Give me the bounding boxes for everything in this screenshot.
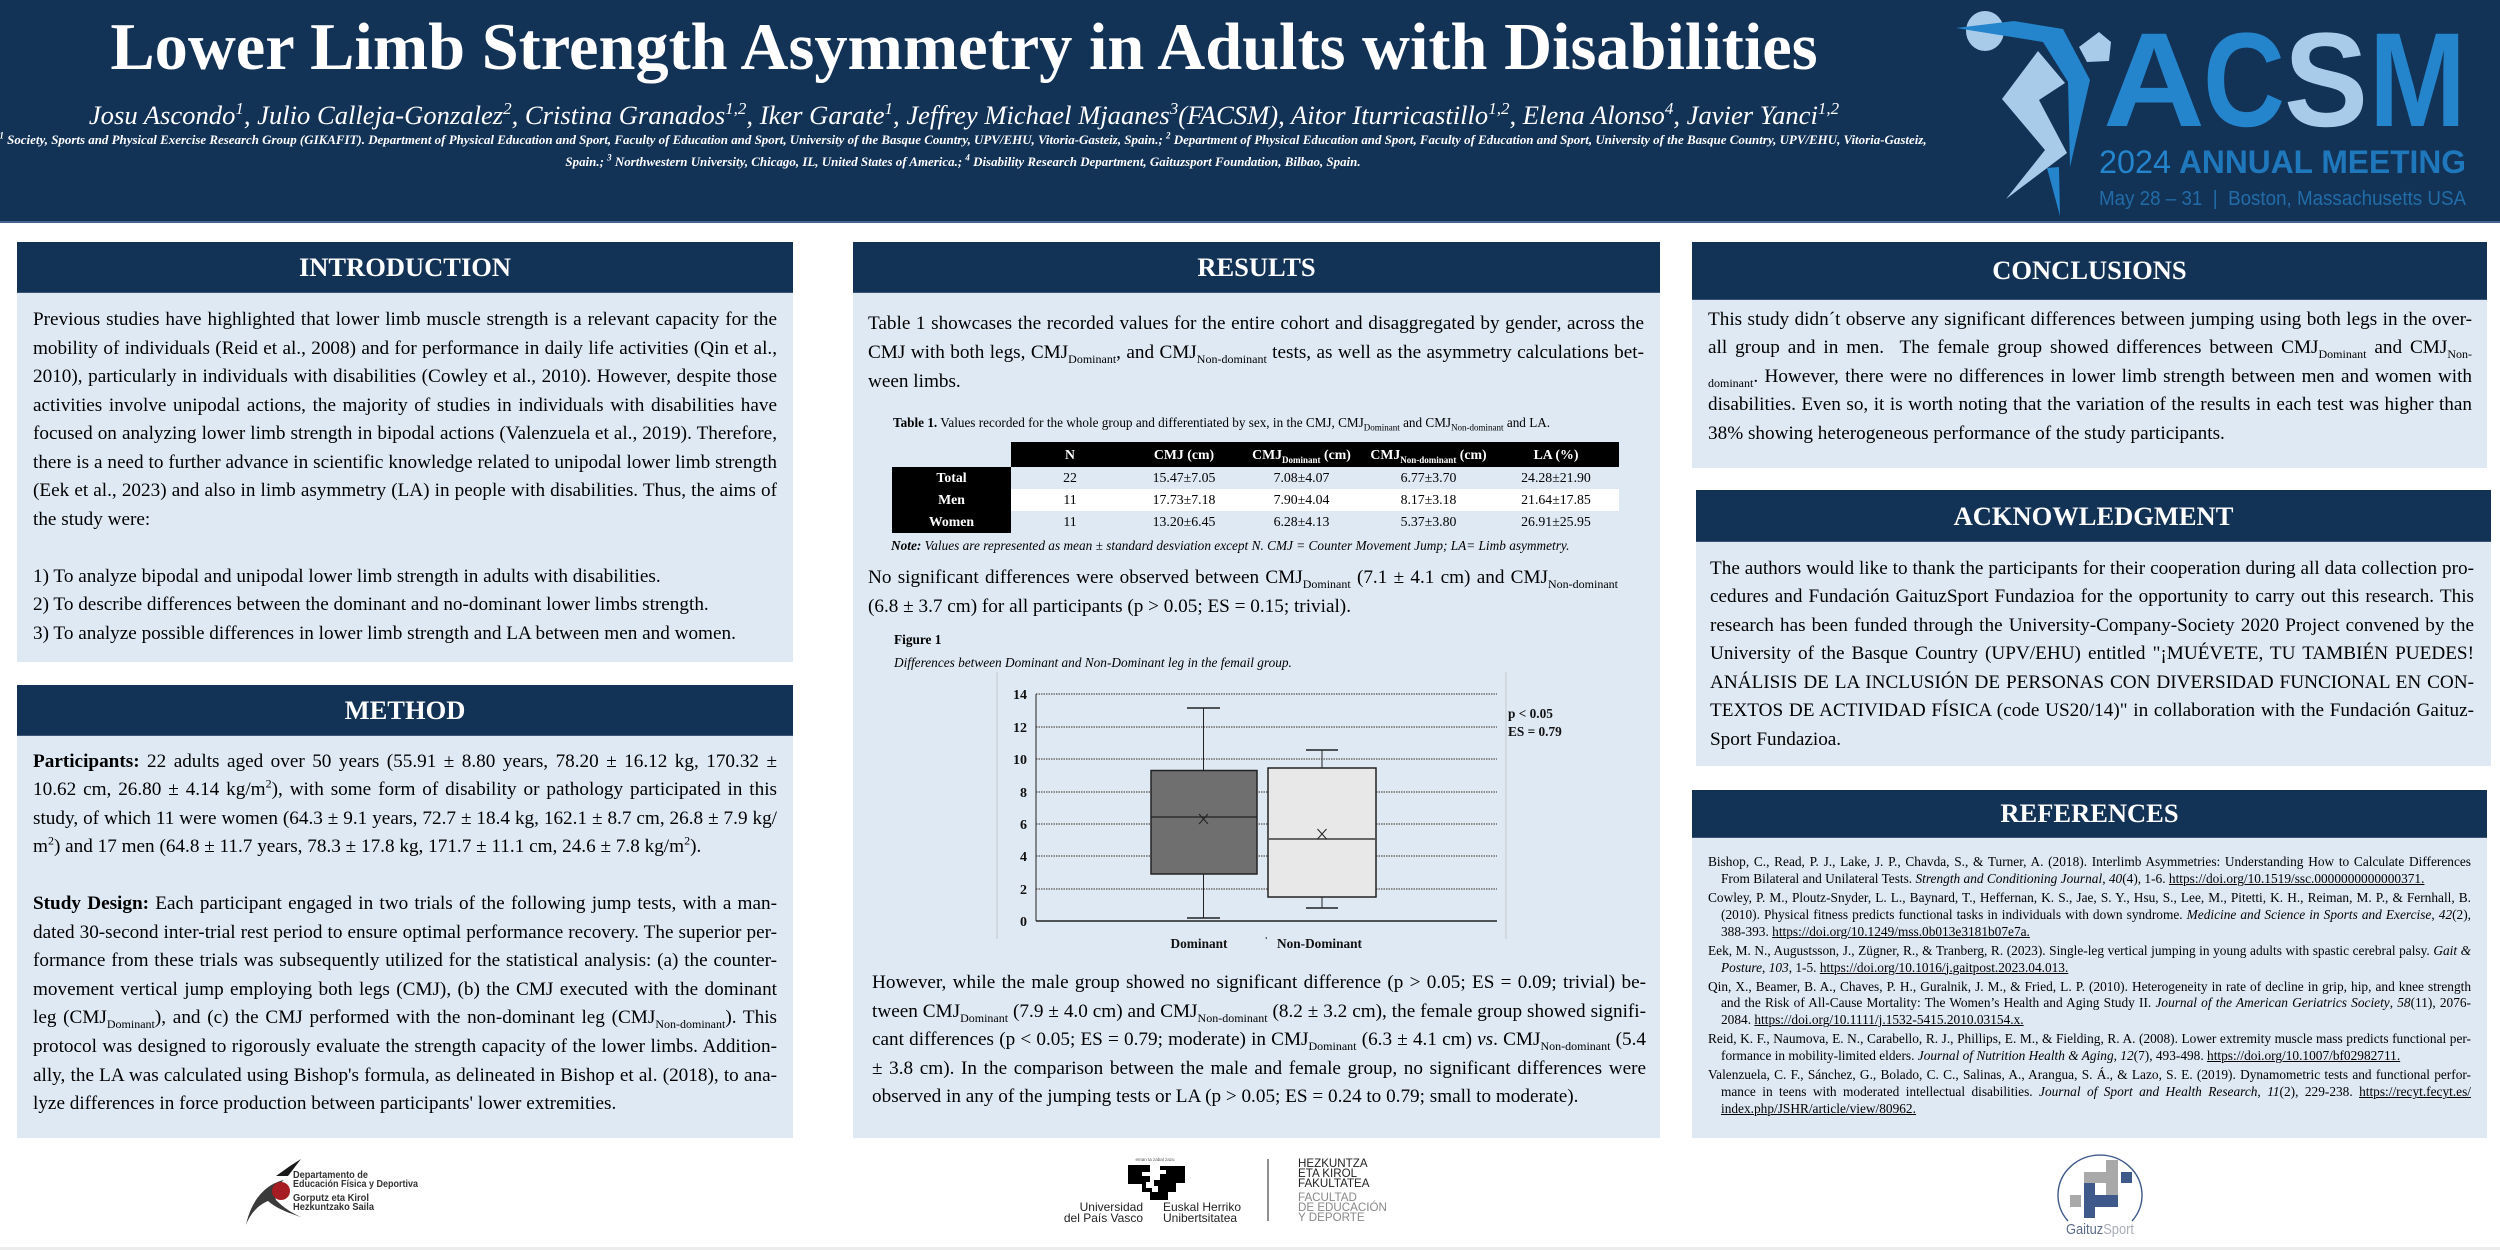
dept logo text: Hezkuntzako Saila [293,1202,374,1213]
text: acknowledgment body: research has been funded through the University-Company-Society 2020 Project convened by the [1710,615,2474,636]
text: no significant differences: (6.8 ± 3.7 cm) for all participants (p > 0.05; ES = 0.15; trivial). [868,596,1351,617]
table 1: 17.73±7.18 [1153,492,1215,507]
text: reference list: formance in mobility-limited elders. Journal of Nutrition Health & Aging, 12(7), 493-498. https://doi.org/10.1007/bf02982711. [1721,1048,2400,1063]
table 1: CMJDominant (cm) [1252,446,1351,464]
text: introduction body: focused on analyzing lower limb strength in bipodal actions (Valenzuela et al., 2019). Therefore, [33,423,777,444]
logo wordmark: ACSM: M [2369,6,2466,155]
y axis labels: 14 [1013,688,1027,703]
table 1: LA (%) [1534,446,1578,462]
logo wordmark: ACSM: S [2284,6,2368,155]
heading: acknowledgment [1696,490,2491,542]
text: method body: study, of which 11 were women (64.3 ± 9.1 years, 72.7 ± 18.4 kg, 162.1 ± 8.7 cm, 26.8 ± 7.9 kg/ [33,808,777,829]
text: method body: lyze differences in force production between participants' lower extremities. [33,1093,616,1114]
logo wordmark: ACSM [2103,6,2466,155]
text: reference list: Cowley, P. M., Ploutz-Snyder, L. L., Baynard, T., Heffernan, K. S., Jae, S. Y., Hsu, S., Lee, M., Pitetti, K. H., Reiman, M. P., & Fernhall, B. [1708,890,2471,905]
table 1 [892,442,1619,533]
text: results intro [868,313,1644,392]
text: introduction body: 2) To describe differences between the dominant and no-dominant lower limbs strength. [33,594,709,615]
table 1: 11 [1063,492,1077,507]
text: reference list: and the Risk of All-Cause Mortality: The Women’s Health and Aging Study II. Journal of the American Geriatrics Society, 58(11), 2076- [1721,995,2471,1010]
icon: ACSM figure [1956,11,2111,216]
text: method body: ally, the LA was calculated using Bishop's formula, as delineated in Bishop et al. (2018), to ana- [33,1065,777,1086]
x axis labels: Non-Dominant [1277,936,1363,951]
logo subtitle: annual meeting: ANNUAL MEETING [2179,144,2466,180]
text: introduction body [33,309,777,644]
title: Lower Limb Strength Asymmetry in Adults with Disabilities [110,11,1818,84]
text: no significant differences: No significant differences were observed between CMJDominant (7.1 ± 4.1 cm) and CMJNon-dominant [868,567,1618,591]
text: acknowledgment body: The authors would like to thank the participants for their cooperation during all data collection pro- [1710,558,2474,578]
text: no significant differences [868,567,1618,617]
affiliations: Spain.; 3 Northwestern University, Chicago, IL, United States of America.; 4 Disability Research Department, Gaituzsport Foundation, Bilbao, Spain. [565,152,1361,168]
table 1: 13.20±6.45 [1153,514,1215,529]
text: reference list: Posture, 103, 1-5. https://doi.org/10.1016/j.gaitpost.2023.04.013. [1721,960,2068,975]
table 1: 8.17±3.18 [1401,492,1456,507]
icon: UPV emblem [1128,1165,1185,1200]
text: acknowledgment body: TEXTOS DE ACTIVIDAD FÍSICA (code US20/14)" in collaboration with the Fundación Gaituz- [1710,700,2474,721]
table note: Note: Values are represented as mean ± standard desviation except N. CMJ = Counter Movement Jump; LA= Limb asymmetry. [891,538,1569,553]
text: method body: movement vertical jump employing both legs (CMJ), (b) the CMJ executed with the dominant [33,979,777,1000]
text: introduction body: the study were: [33,509,150,530]
text: conclusions body: 38% showing heterogeneous performance of the study participants. [1708,423,2225,444]
table 1: 7.08±4.07 [1274,470,1329,485]
logo: departamento de educacion fisica y deportiva [246,1159,418,1225]
text: reference list: index.php/JSHR/article/view/80962. [1721,1101,1916,1116]
heading: method: METHOD [345,695,465,725]
table caption: Table 1. Values recorded for the whole group and differentiated by sex, in the CMJ, CMJDominant and CMJNon-dominant and LA. [893,415,1550,433]
text: reference list: Qin, X., Beamer, B. A., Chaves, P. H., Guralnik, J. M., & Fried, L. P. (2010). Heterogeneity in rate of decline in grip, hip, and knee strength [1708,979,2471,994]
text: reference list: Reid, K. F., Naumova, E. N., Carabello, R. J., Phillips, E. M., & Fielding, R. A. (2008). Lower extremity muscle mass predicts functional per- [1708,1031,2471,1046]
faculty text: FAKULTATEA [1298,1177,1370,1190]
text: conclusions body: dominant. However, there were no differences in lower limb strength between men and women with [1708,366,2472,389]
text: reference list: (2010). Physical fitness predicts functional tasks in individuals with down syndrome. Medicine and Science in Sports and Exercise, 42(2), [1721,907,2471,922]
text: method body [33,750,777,1114]
upv text spanish and basque: del País Vasco [1064,1211,1143,1225]
text: method body: leg (CMJDominant), and (c) the CMJ performed with the non-dominant leg (CMJNon-dominant). This [33,1007,777,1031]
table 1: 15.47±7.05 [1153,470,1215,485]
chart: box plot dominant vs non-dominant [996,672,1562,951]
text: conclusions body: This study didn´t observe any significant differences between jumping using both legs in the over- [1708,308,2472,330]
text: introduction body: 2010), particularly in individuals with disabilities (Cowley et al., 2010). However, despite those [33,366,777,387]
text: acknowledgment body: Sport Fundazioa. [1710,729,1841,750]
text: introduction body: Previous studies have highlighted that lower limb muscle strength is a relevant capacity for the [33,309,777,330]
heading: conclusions: CONCLUSIONS [1992,255,2187,285]
text: method body: Participants: 22 adults aged over 50 years (55.91 ± 8.80 years, 78.20 ± 16.12 kg, 170.32 ± [33,750,777,772]
logo: ACSM 2024 annual meeting [1956,6,2467,216]
text: introduction body: 1) To analyze bipodal and unipodal lower limb strength in adults with disabilities. [33,566,661,587]
table 1: CMJNon-dominant (cm) [1370,446,1487,464]
text: reference list: From Bilateral and Unilateral Tests. Strength and Conditioning Journal, 40(4), 1-6. https://doi.org/10.1519/ssc.0000000000000371. [1721,871,2424,886]
table 1: 6.28±4.13 [1274,514,1329,529]
significance note: p < 0.05 [1508,706,1553,721]
table 1: 7.90±4.04 [1274,492,1329,507]
significance note: ES = 0.79 [1508,724,1562,739]
table 1: 21.64±17.85 [1521,492,1591,507]
text: conclusions body: all group and in men. The female group showed differences between CMJDominant and CMJNon- [1708,337,2472,361]
panel: references [1692,790,2487,1138]
heading: references [1692,790,2487,838]
text: reference list: 388-393. https://doi.org/10.1249/mss.0b013e3181b07e7a. [1721,924,2030,939]
text: conclusions body [1708,308,2472,444]
text: results discussion: cant differences (p < 0.05; ES = 0.79; moderate) in CMJDominant (6.3 ± 4.1 cm) vs. CMJNon-dominant (5.4 [872,1029,1646,1053]
text: results discussion: observed in any of the jumping tests or LA (p > 0.05; ES = 0.24 to 0.79; small to moderate). [872,1086,1578,1107]
text: acknowledgment body: University of the Basque Country (UPV/EHU) entitled "¡MUÉVETE, TU TAMBIÉN PUEDES! [1710,643,2474,664]
text: acknowledgment body: cedures and Fundación GaituzSport Fundazioa for the opportunity to carry out this research. This [1710,586,2474,607]
table 1: 26.91±25.95 [1521,514,1591,529]
text: acknowledgment body: ANÁLISIS DE LA INCLUSIÓN DE PERSONAS CON DIVERSIDAD FUNCIONAL EN CON- [1710,672,2474,693]
text: introduction body: activities involve unipodal actions, the majority of studies in individuals with disabilities have [33,395,777,416]
table 1: Total [936,470,967,485]
panel: conclusions [1692,242,2487,468]
text: introduction body: mobility of individuals (Reid et al., 2008) and for performance in daily life activities (Qin et al., [33,338,777,359]
upv text spanish and basque: Unibertsitatea [1163,1211,1237,1225]
y axis labels: 4 [1020,850,1027,865]
y axis labels: 0 [1020,915,1027,930]
text: reference list [1708,854,2471,1116]
icon: GaituzSport squares [2070,1160,2132,1218]
text: reference list: Eek, M. N., Augustsson, J., Zügner, R., & Tranberg, R. (2023). Single-leg vertical jumping in young adults with spastic cerebral palsy. Gait & [1708,943,2471,958]
upv text spanish and basque [1064,1200,1241,1225]
GaituzSport wordmark: GaituzSport [2066,1221,2135,1238]
x axis labels [1171,936,1363,951]
table 1: CMJ (cm) [1154,446,1214,462]
text: results discussion: However, while the male group showed no significant difference (p > 0.05; ES = 0.09; trivial) be- [872,972,1646,993]
text: method body: dated 30-second inter-trial rest period to ensure optimal performance recovery. The superior per- [33,922,777,943]
faculty text [1298,1157,1387,1224]
table 1: 5.37±3.80 [1401,514,1456,529]
table 1: 22 [1063,470,1077,485]
heading: acknowledgment: ACKNOWLEDGMENT [1954,501,2233,531]
text: results discussion [872,972,1646,1107]
figure 1 heading: Figure 1 [894,632,941,647]
affiliations: 1 Society, Sports and Physical Exercise Research Group (GIKAFIT). Department of Physical Education and Sport, Faculty of Education and Sport, University of the Basque Country, UPV/EHU, Vitoria-Gasteiz, Spain.; 2 Department of Physical Education and Sport, Faculty of Education and Sport, University of the Basque Country, UPV/EHU, Vitoria-Gasteiz, [0,130,1927,146]
dept logo text: Gorputz eta Kirol [293,1193,369,1204]
text: results intro: ween limbs. [868,371,961,392]
text: reference list: 2084. https://doi.org/10.1111/j.1532-5415.2010.03154.x. [1721,1012,2024,1027]
heading: references: REFERENCES [2000,798,2179,828]
icon: dept athlete figure [246,1159,301,1225]
text: reference list: Bishop, C., Read, P. J., Lake, J. P., Chavda, S., & Turner, A. (2018). Interlimb Asymmetries: Understanding How to Calculate Differences [1708,854,2471,869]
header banner [0,0,2500,223]
text: conclusions body: disabilities. Even so, it is worth noting that the variation of the results in each test was higher than [1708,394,2472,415]
box: dominant [1151,708,1257,918]
panel: introduction [17,242,793,662]
logo wordmark: ACSM: C [2203,6,2285,155]
upv text spanish and basque: Universidad [1080,1200,1143,1214]
text: method body: m2) and 17 men (64.8 ± 11.7 years, 78.3 ± 17.8 kg, 171.7 ± 11.1 cm, 24.6 ± 7.8 kg/m2). [33,834,701,857]
text: introduction body: (Eek et al., 2023) and also in limb asymmetry (LA) in people with disabilities. Thus, the aims of [33,480,777,501]
affiliations [0,130,1927,168]
y axis labels: 6 [1020,818,1027,833]
faculty text: ETA KIROL [1298,1167,1358,1180]
y axis labels: 10 [1013,753,1027,768]
y axis labels: 12 [1013,721,1027,736]
heading: introduction [17,242,793,293]
dept logo text: Educación Física y Deportiva [293,1179,418,1190]
heading: method [17,685,793,736]
heading: introduction: INTRODUCTION [299,252,511,282]
text: method body: Study Design: Each participant engaged in two trials of the following jump tests, with a man- [33,893,777,914]
panel: acknowledgment [1696,490,2491,766]
text: method body: protocol was designed to rigorously evaluate the strength capacity of the lower limbs. Addition- [33,1036,777,1057]
dept logo text [293,1170,418,1213]
text: results discussion: ± 3.8 cm). In the comparison between the male and female group, no significant differences were [872,1058,1646,1079]
x axis labels: Dominant [1171,936,1228,951]
logo: GaituzSport [2057,1154,2143,1238]
logo subtitle: annual meeting: 2024 [2099,144,2171,180]
significance note [1508,706,1562,739]
box: non-dominant [1268,750,1376,908]
logo: universidad del pais vasco [1064,1157,1387,1225]
text: acknowledgment body [1710,558,2474,750]
faculty text: HEZKUNTZA [1298,1157,1368,1170]
text: results intro: Table 1 showcases the recorded values for the entire cohort and disaggregated by gender, across the [868,313,1644,334]
text: introduction body: 3) To analyze possible differences in lower limb strength and LA between men and women. [33,623,736,644]
y axis labels: 2 [1020,883,1027,898]
heading: results: RESULTS [1197,252,1316,282]
heading: conclusions [1692,242,2487,300]
logo wordmark: ACSM: A [2103,6,2205,155]
text: reference list: Valenzuela, C. F., Sánchez, G., Bolado, C. C., Salinas, A., Arangua, S. Á., & Lazo, S. E. (2019). Dynamometric tests and functional perfor- [1708,1067,2471,1082]
panel: method [17,685,793,1138]
logo date and place: May 28 – 31 | Boston, Massachusetts USA [2099,188,2467,210]
faculty text: FACULTAD [1298,1191,1357,1204]
text: results discussion: tween CMJDominant (7.9 ± 4.0 cm) and CMJNon-dominant (8.2 ± 3.2 cm), the female group showed signifi- [872,1001,1646,1024]
y axis labels: 8 [1020,786,1027,801]
table 1: Women [929,514,974,529]
table 1: N [1065,446,1075,462]
table 1: 24.28±21.90 [1521,470,1591,485]
y axis labels [1013,688,1027,930]
text: method body: 10.62 cm, 26.80 ± 4.14 kg/m2), with some form of disability or pathology participated in this [33,777,777,800]
authors: Josu Ascondo1, Julio Calleja-Gonzalez2, Cristina Granados1,2, Iker Garate1, Jeffrey Michael Mjaanes3(FACSM), Aitor Iturricastillo1,2, Elena Alonso4, Javier Yanci1,2 [89,99,1839,130]
faculty text: DE EDUCACIÓN [1298,1201,1387,1214]
upv text spanish and basque: Euskal Herriko [1163,1200,1241,1214]
figure 1 subtitle: Differences between Dominant and Non-Dominant leg in the femail group. [894,655,1292,670]
table 1: 6.77±3.70 [1401,470,1456,485]
faculty text: Y DEPORTE [1298,1211,1365,1224]
heading: results [853,242,1660,293]
table 1: 11 [1063,514,1077,529]
chart axes [1036,694,1497,921]
dept logo text: Departamento de [293,1170,368,1181]
text: results intro: CMJ with both legs, CMJDominant, and CMJNon-dominant tests, as well as the asymmetry calculations bet- [868,342,1644,366]
text: reference list: mance in teens with moderated intellectual disabilities. Journal of Sport and Health Research, 11(2), 229-238. https://recyt.fecyt.es/ [1721,1084,2471,1099]
motto: eman ta zabal zazu [1135,1157,1175,1162]
text: method body: formance from these trials was subsequently utilized for the statistical analysis: (a) the counter- [33,950,777,971]
table 1: Men [938,492,965,507]
text: introduction body: there is a need to further advance in scientific knowledge related to unipodal lower limb strength [33,452,777,473]
panel: results [853,242,1660,1138]
